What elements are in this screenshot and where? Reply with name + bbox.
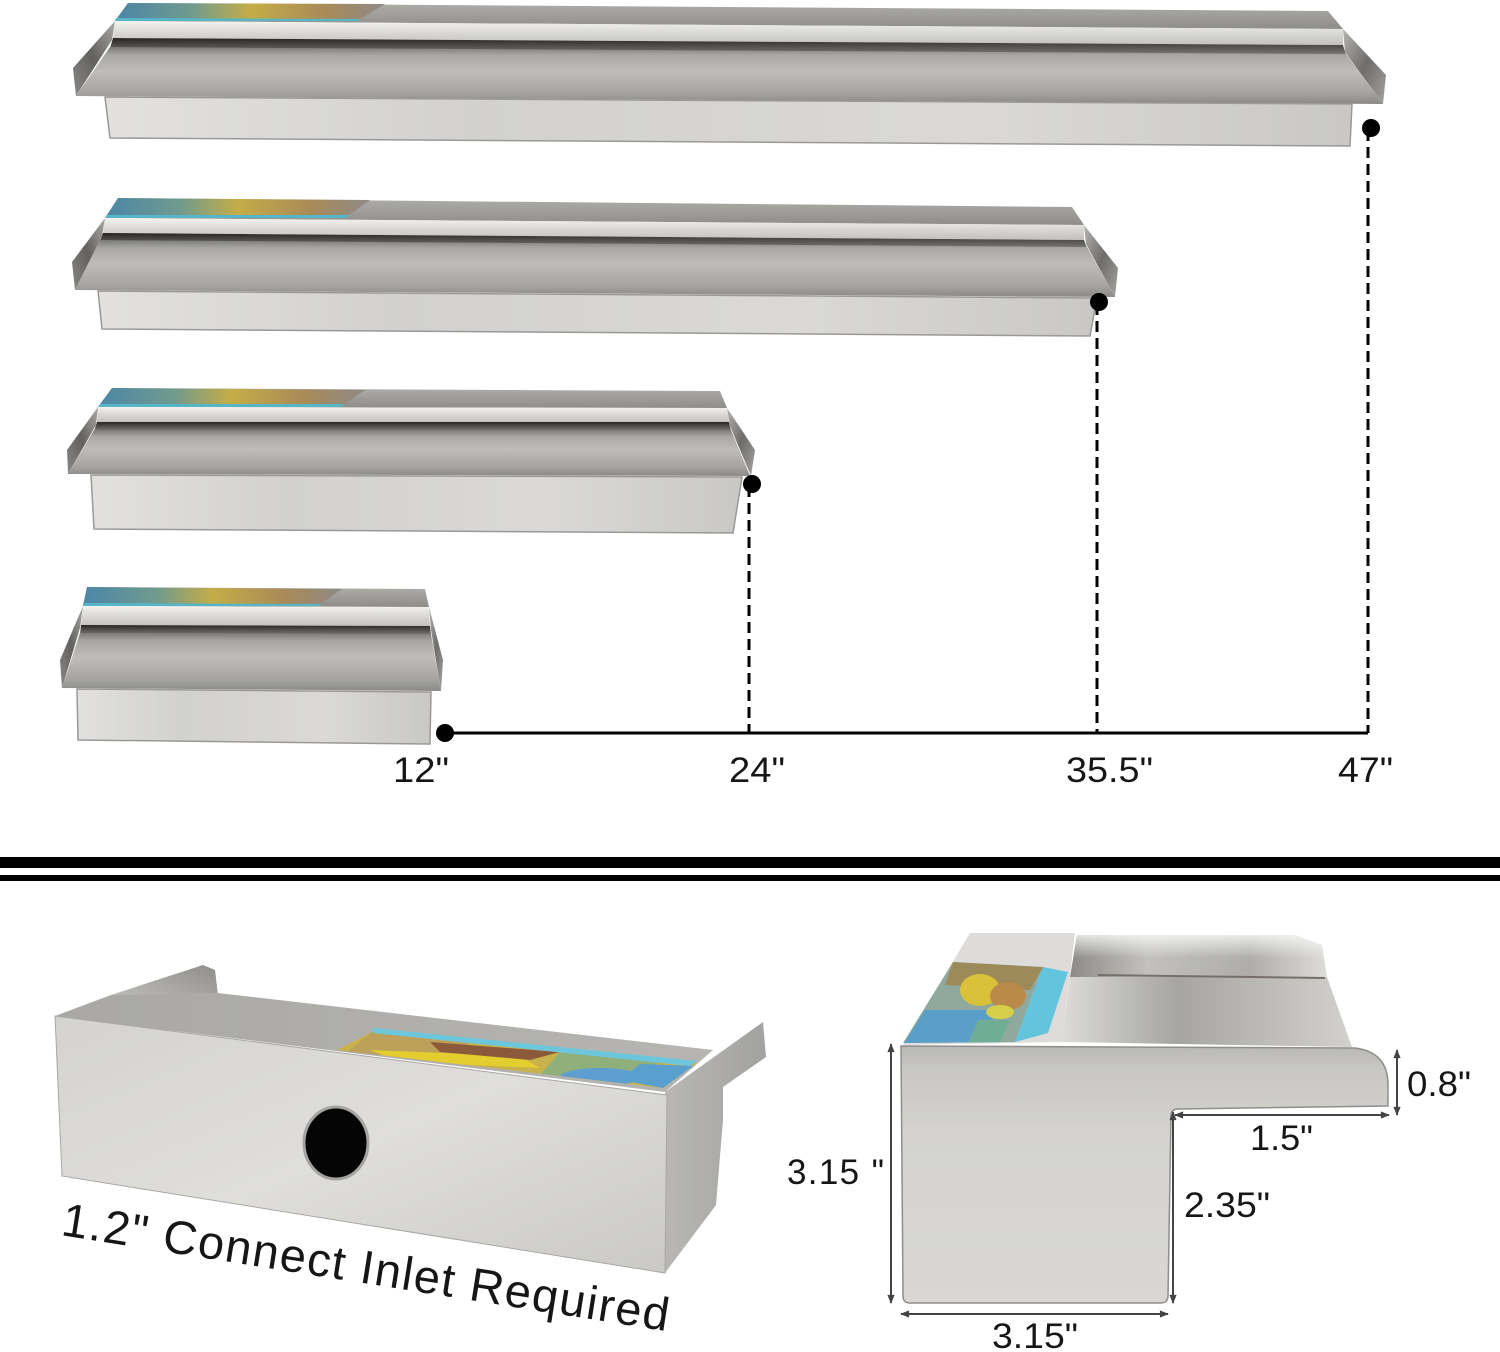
front face — [55, 1016, 667, 1273]
length measurement scale — [393, 119, 1393, 790]
label 0.8: 0.8" — [1407, 1065, 1471, 1104]
height arrow 3.15 — [890, 1044, 892, 1303]
label height 3.15: 3.15 " — [787, 1153, 884, 1192]
height arrow 0.8 — [1396, 1050, 1398, 1115]
product label — [337, 1032, 697, 1088]
spillway 12 inch — [60, 587, 443, 744]
label cyan strip — [373, 1028, 697, 1066]
side face and right fin — [665, 1022, 766, 1273]
label 2.35: 2.35" — [1184, 1186, 1270, 1225]
left fin — [111, 965, 218, 1004]
length arrow 1.5 — [1175, 1114, 1389, 1116]
label 47 inch: 47" — [1338, 751, 1393, 790]
crease line — [1098, 975, 1325, 978]
spillway 35.5 inch — [72, 198, 1118, 336]
label 1.5: 1.5" — [1250, 1119, 1313, 1158]
spillway 24 inch — [67, 388, 755, 533]
side profile view — [787, 933, 1471, 1352]
marker dot 35.5 inch — [1090, 293, 1108, 311]
label 12 inch: 12" — [393, 751, 449, 790]
dashed guide 24 inch — [748, 486, 750, 733]
baseline — [445, 732, 1368, 734]
cyan label strip — [1015, 967, 1068, 1042]
top deck — [55, 993, 713, 1092]
marker dot 24 inch — [743, 475, 761, 493]
inlet caption: 1.2" Connect Inlet Required — [58, 1193, 673, 1341]
upper channel highlight — [1074, 935, 1324, 958]
rear view with inlet — [55, 965, 766, 1341]
marker dot 12 inch — [436, 724, 454, 742]
spillway 47 inch — [73, 3, 1386, 146]
front L profile — [901, 1046, 1388, 1303]
lower channel — [1062, 977, 1352, 1047]
inlet hole — [304, 1107, 368, 1179]
width arrow 3.15 — [901, 1313, 1168, 1315]
double divider rule — [0, 857, 1500, 881]
height arrow 2.35 — [1172, 1112, 1174, 1303]
dashed guide 35.5 inch — [1096, 304, 1098, 733]
product label — [903, 962, 1043, 1043]
label 24 inch: 24" — [729, 751, 785, 790]
upper channel — [1070, 935, 1327, 977]
dashed guide 47 inch — [1366, 130, 1370, 733]
top deck — [903, 933, 1075, 1045]
label 35.5 inch: 35.5" — [1066, 751, 1153, 790]
marker dot 47 inch — [1362, 119, 1380, 137]
